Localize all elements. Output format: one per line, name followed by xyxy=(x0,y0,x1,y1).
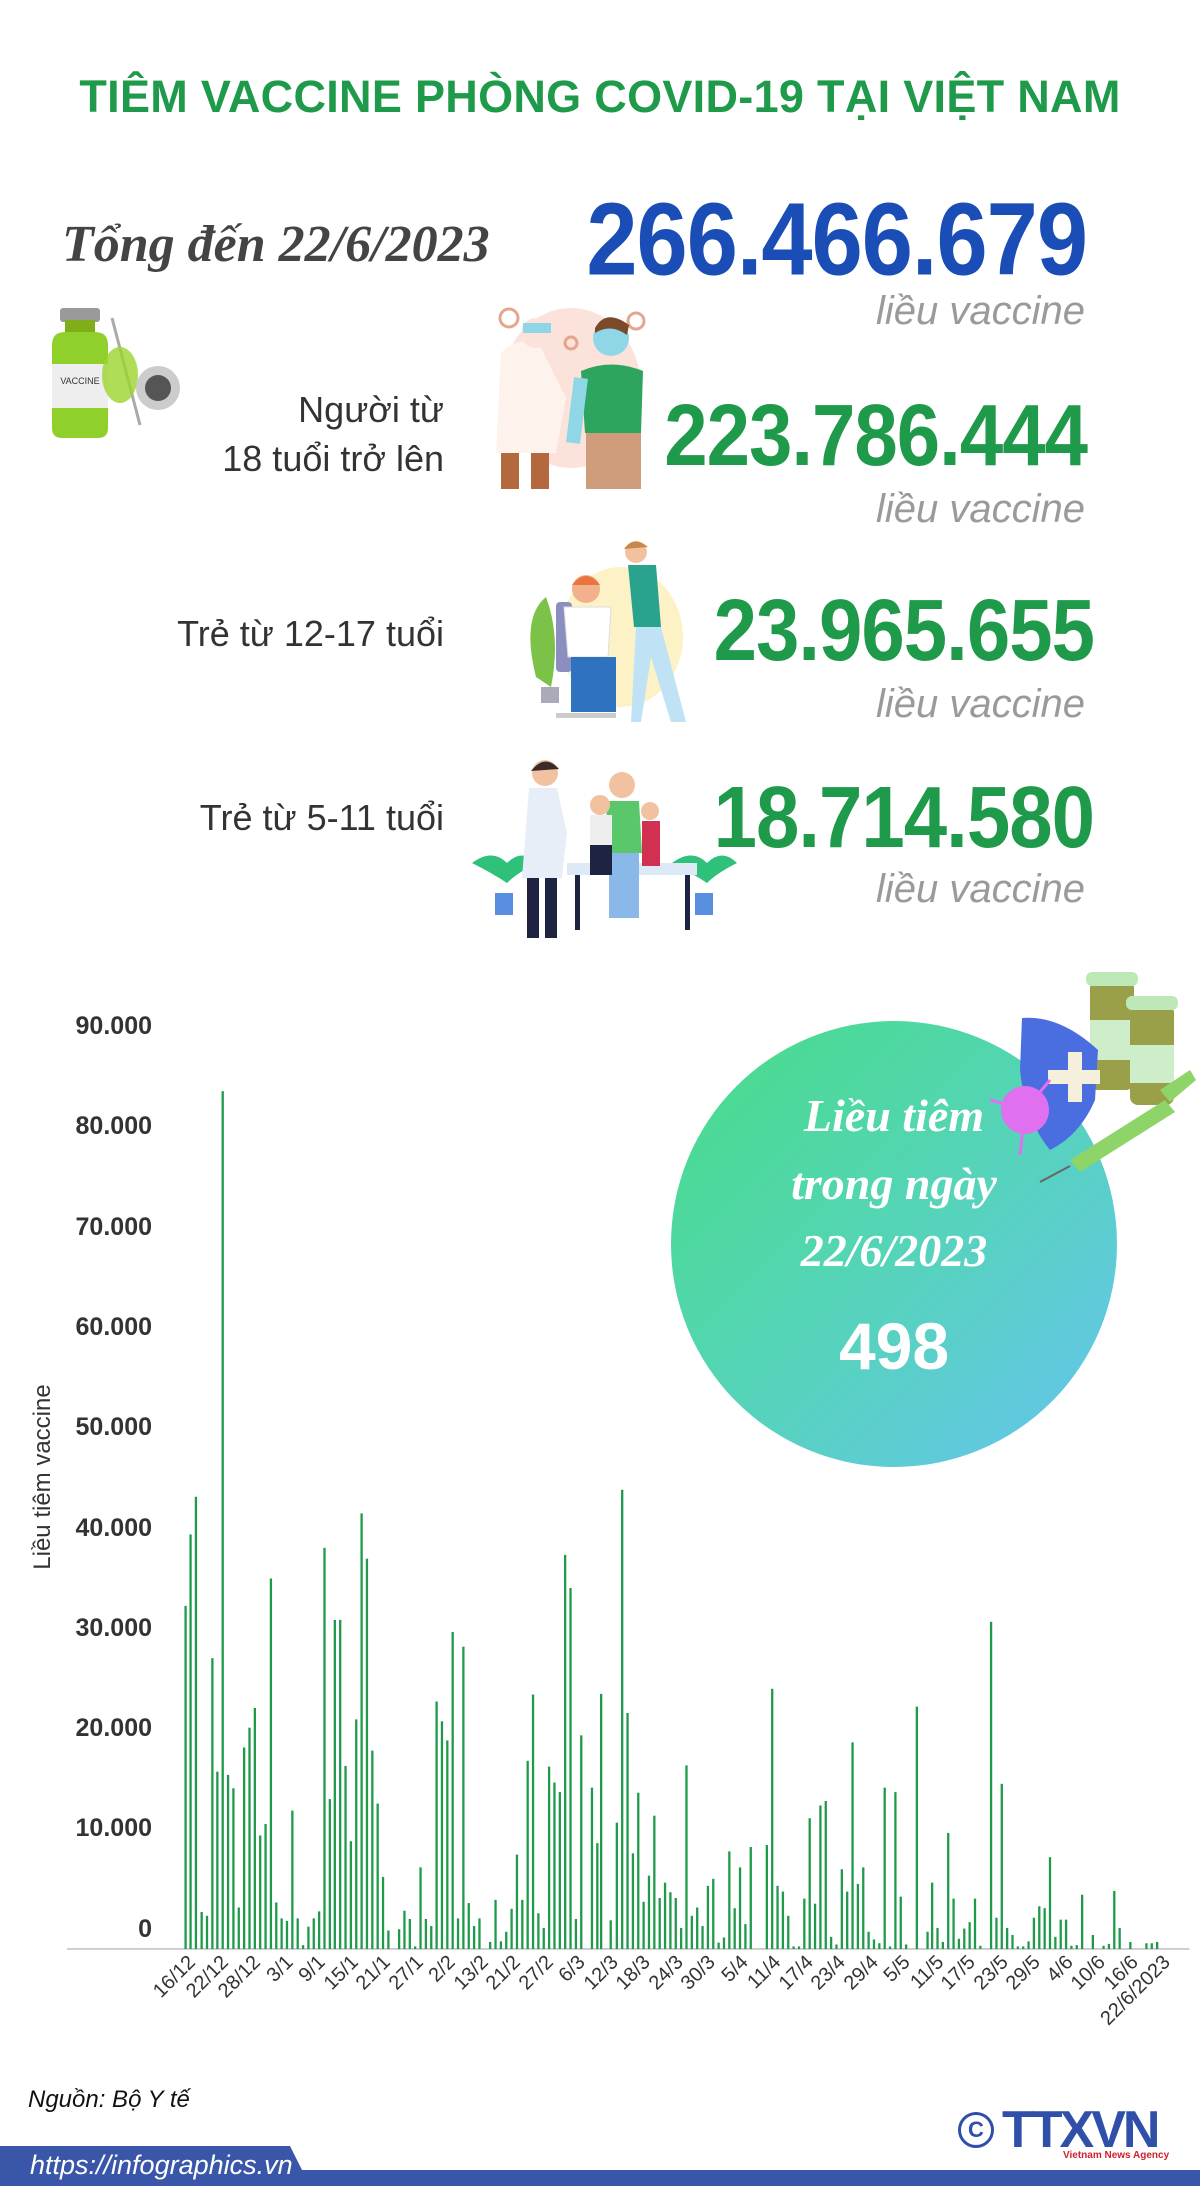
illustration: teen vaccination xyxy=(530,541,686,722)
x-axis date labels: 21/2 xyxy=(482,1951,525,1994)
x-axis date labels: 5/5 xyxy=(880,1951,915,1987)
illustration: child vaccination xyxy=(472,760,737,938)
label: 12-17: Trẻ từ 12-17 tuổi xyxy=(177,613,444,654)
x-axis date labels: 29/5 xyxy=(1002,1951,1045,1994)
x-axis date labels: 30/3 xyxy=(677,1951,720,1994)
x-axis date labels: 29/4 xyxy=(840,1951,883,1994)
logo: TTXVN: Vietnam News Agency xyxy=(1063,2150,1169,2161)
icon: vaccine vial xyxy=(52,308,180,438)
title: TIÊM VACCINE PHÒNG COVID-19 TẠI VIỆT NAM xyxy=(79,71,1121,122)
bar chart: daily doses (left half) xyxy=(67,1091,600,1950)
callout: daily doses circle xyxy=(671,1021,1117,1467)
icon: vaccine vial: VACCINE xyxy=(60,376,100,386)
y-axis labels: 10.000 xyxy=(76,1814,152,1842)
x-axis date labels: 23/4 xyxy=(807,1951,850,1994)
number: 12-17: 23.965.655 xyxy=(714,581,1094,679)
unit: adults: liều vaccine xyxy=(876,487,1085,531)
y-axis labels: 0 xyxy=(138,1915,152,1943)
x-axis date labels: 4/6 xyxy=(1043,1951,1078,1987)
source note: Nguồn: Bộ Y tế xyxy=(28,2086,190,2113)
y-axis labels: 30.000 xyxy=(76,1614,152,1642)
bar chart: daily doses (right half) xyxy=(600,1490,1190,1950)
x-axis date labels: 27/2 xyxy=(515,1951,558,1994)
x-axis date labels: 24/3 xyxy=(645,1951,688,1994)
total unit: liều vaccine xyxy=(876,289,1085,333)
y-axis labels: 80.000 xyxy=(76,1112,152,1140)
total number: 266.466.679 xyxy=(586,183,1087,297)
x-axis date labels: 15/1 xyxy=(320,1951,363,1994)
x-axis date labels: 27/1 xyxy=(385,1951,428,1994)
total label: Tổng đến 22/6/2023 xyxy=(62,216,490,273)
callout: daily doses circle: Liều tiêm xyxy=(804,1090,984,1141)
x-axis date labels: 5/4 xyxy=(718,1951,753,1987)
icon: shield vials syringe virus xyxy=(990,972,1196,1183)
x-axis date labels: 16/12 xyxy=(149,1951,200,2002)
y-axis title: Liều tiêm vaccine xyxy=(29,1384,56,1570)
unit: 12-17: liều vaccine xyxy=(876,682,1085,726)
x-axis date labels: 16/6 xyxy=(1100,1951,1143,1994)
x-axis date labels: 17/5 xyxy=(937,1951,980,1994)
x-axis date labels: 23/5 xyxy=(970,1951,1013,1994)
callout: daily doses circle: trong ngày xyxy=(791,1158,997,1209)
x-axis date labels: 11/5 xyxy=(906,1951,948,1993)
x-axis date labels: 21/1 xyxy=(352,1951,395,1994)
footer bar with url: https://infographics.vn xyxy=(30,2150,293,2180)
y-axis labels xyxy=(76,1012,152,1943)
logo: TTXVN: TTXVN xyxy=(1002,2101,1157,2159)
label: adults xyxy=(222,389,444,479)
y-axis labels: 40.000 xyxy=(76,1514,152,1542)
label: adults: 18 tuổi trở lên xyxy=(222,438,444,479)
y-axis labels: 50.000 xyxy=(76,1413,152,1441)
x-axis date labels: 22/12 xyxy=(182,1951,233,2002)
unit: 5-11: liều vaccine xyxy=(876,867,1085,911)
y-axis labels: 20.000 xyxy=(76,1714,152,1742)
x-axis date labels: 22/6/2023 xyxy=(1096,1951,1175,2030)
x-axis date labels: 17/4 xyxy=(775,1951,818,1994)
x-axis date labels: 2/2 xyxy=(425,1951,460,1987)
label: adults: Người từ xyxy=(298,389,444,430)
x-axis date labels: 12/3 xyxy=(580,1951,623,1994)
x-axis date labels: 3/1 xyxy=(263,1951,298,1987)
callout: daily doses circle: 22/6/2023 xyxy=(801,1225,987,1276)
illustration: adult vaccination xyxy=(496,308,646,489)
number: adults: 223.786.444 xyxy=(664,386,1087,484)
callout: daily doses circle: 498 xyxy=(839,1309,949,1383)
label: 5-11: Trẻ từ 5-11 tuổi xyxy=(200,797,444,838)
y-axis labels: 70.000 xyxy=(76,1213,152,1241)
x-axis date labels: 11/4 xyxy=(743,1951,785,1993)
x-axis date labels: 10/6 xyxy=(1067,1951,1110,1994)
x-axis date labels: 9/1 xyxy=(295,1951,330,1987)
number: 5-11: 18.714.580 xyxy=(714,768,1094,866)
x-axis date labels: 28/12 xyxy=(214,1951,265,2002)
x-axis date labels: 6/3 xyxy=(555,1951,590,1987)
logo: TTXVN: C xyxy=(968,2117,984,2142)
y-axis labels: 90.000 xyxy=(76,1012,152,1040)
x-axis date labels: 13/2 xyxy=(450,1951,493,1994)
x-axis date labels: 18/3 xyxy=(612,1951,655,1994)
y-axis labels: 60.000 xyxy=(76,1313,152,1341)
footer bar with url xyxy=(0,2146,1200,2186)
